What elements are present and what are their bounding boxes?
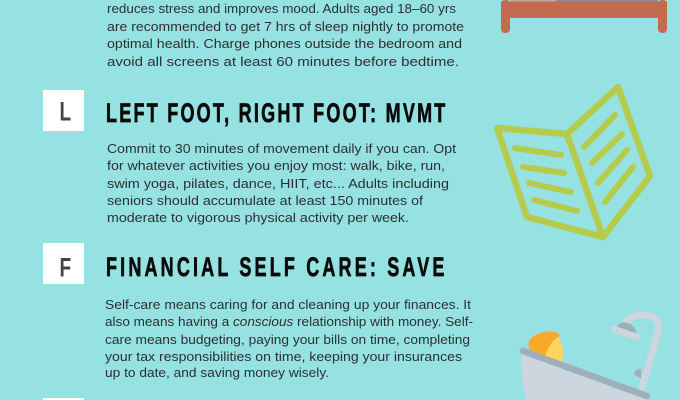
letter badge: cropped next section — [43, 398, 84, 400]
text block: finances: care means budgeting, paying your bills on time, completing — [105, 332, 470, 347]
letter badge: L: L — [60, 96, 71, 126]
text block: finances: up to date, and saving money wisely. — [105, 365, 329, 380]
text block: sleep: reduces stress and improves mood. Adults aged 18–60 yrs — [107, 1, 457, 16]
text block: movement: seniors should accumulate at least 150 minutes of — [107, 193, 423, 208]
icon: open book — [497, 87, 650, 237]
text block: movement: swim yoga, pilates, dance, HIIT, etc... Adults including — [107, 176, 449, 191]
text block: finances: your tax responsibilities on time, keeping your insurances — [105, 349, 463, 364]
text block: movement: moderate to vigorous physical activity per week. — [107, 210, 409, 225]
text block: finances: Self-care means caring for and cleaning up your finances. It — [105, 297, 471, 312]
letter badge: F: F — [60, 252, 71, 282]
text block: sleep — [107, 1, 464, 69]
text block: sleep: are recommended to get 7 hrs of sleep nightly to promote — [107, 19, 464, 34]
letter badge: L — [43, 90, 84, 131]
text block: sleep: optimal health. Charge phones outside the bedroom and — [107, 36, 462, 51]
text block: movement: Commit to 30 minutes of movement daily if you can. Opt — [107, 141, 456, 156]
heading: financial self care: FINANCIAL SELF CARE: SAVE — [106, 253, 444, 282]
text block: finances: also means having a conscious relationship with money. Self- — [105, 314, 473, 329]
text block: movement — [107, 141, 456, 225]
text block: movement: for whatever activities you enjoy most: walk, bike, run, — [107, 158, 445, 173]
letter badge: F — [43, 243, 84, 284]
icon: bed — [501, 0, 667, 33]
icon: bathtub with shower — [521, 315, 659, 400]
text block: sleep: avoid all screens at least 60 minutes before bedtime. — [107, 54, 459, 69]
heading: left foot, right foot: LEFT FOOT, RIGHT FOOT: MVMT — [106, 99, 445, 128]
text block: finances — [105, 297, 473, 380]
